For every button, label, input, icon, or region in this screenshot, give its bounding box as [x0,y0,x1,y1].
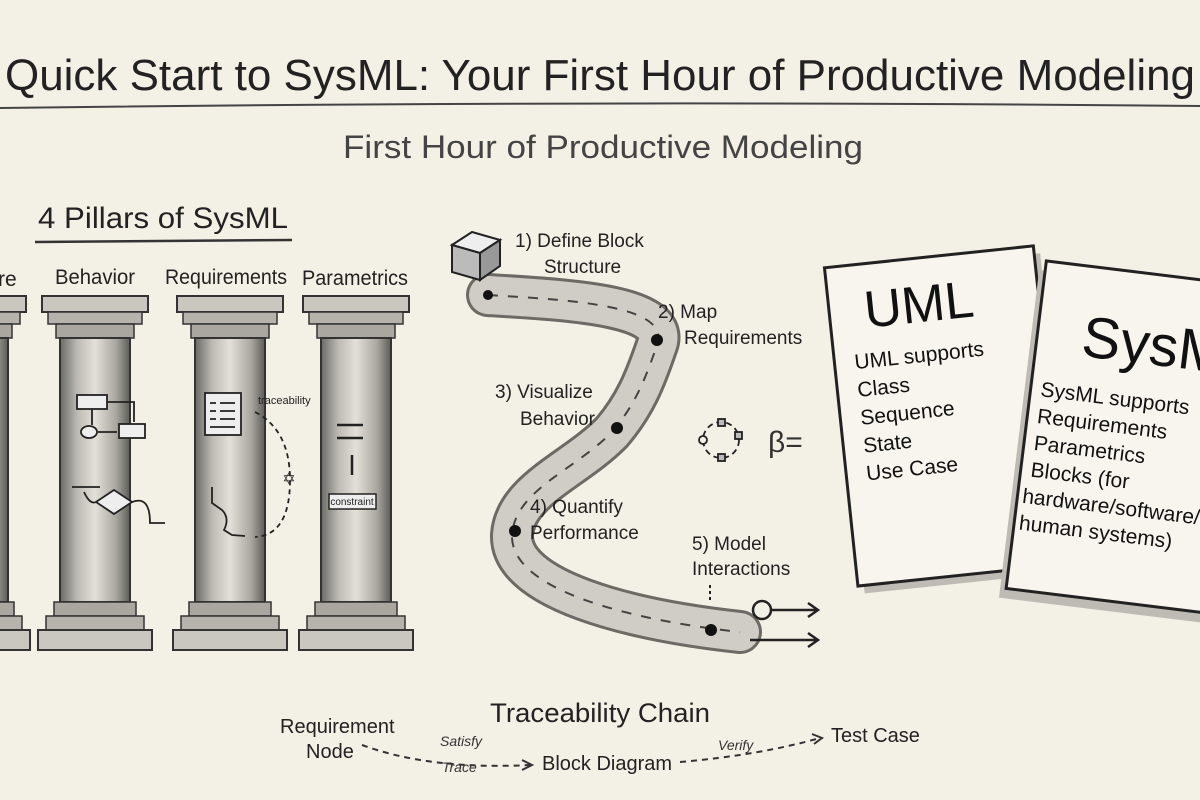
panel: UML doc: UML [861,271,977,340]
panel: SysML doc: hardware/software/ [1021,485,1200,529]
panel: SysML doc: human systems) [1018,512,1174,553]
arrows [750,601,818,647]
panel: traceability chain: Test Case [831,725,920,747]
step 3: 3) Visualize [495,382,593,403]
pillar labels: Behavior [55,266,135,289]
panel: traceability chain: Verify [718,737,754,753]
pillar: structure (partial) [0,296,30,650]
panel: traceability chain [280,698,920,775]
panel: pillars [0,266,413,650]
step 5: 5) Model [692,534,766,555]
panel: SysML doc: Requirements [1036,405,1168,444]
panel: UML doc [824,245,1074,594]
pillar labels [0,266,408,291]
pillar: requirements [173,296,311,650]
panel: UML doc: Use Case [865,453,959,486]
step 4: 4) Quantify [530,497,623,518]
step 3: Behavior [520,409,596,430]
panel: traceability chain: Trace [442,759,477,775]
panel: traceability chain: Requirement [280,716,395,738]
panel: UML doc: Sequence [859,397,956,430]
pillar labels: Requirements [165,266,287,289]
road [488,295,740,632]
panel: UML doc: UML supports [853,338,985,374]
icon: cycle [699,419,742,461]
pillar: behavior [38,296,165,650]
step 2: 2) Map [658,302,717,323]
pillar: requirements: ✡ [282,471,296,488]
icon: cube [452,232,500,280]
panel: SysML doc [999,260,1200,625]
title: Quick Start to SysML: Your First Hour of Productive Modeling [5,51,1195,100]
panel: UML doc: State [862,430,913,458]
panel: UML doc: Class [856,374,911,402]
pillar: parametrics: constraint [330,497,374,508]
panel: traceability chain: Block Diagram [542,753,672,775]
pillar: requirements: traceability [258,395,311,407]
panel: traceability chain: Node [306,741,354,763]
pillar: parametrics [299,296,413,650]
panel: roadmap [452,231,818,647]
panel: traceability chain: Traceability Chain [490,698,710,728]
step 5: Interactions [692,559,790,580]
step markers [483,290,717,636]
step 4: Performance [530,523,639,544]
heading: 4 pillars: 4 Pillars of SysML [38,202,288,235]
panel: SysML doc: SysML supports [1039,378,1191,419]
beta: β= [768,426,803,459]
panel: SysML doc: Blocks (for [1029,459,1131,494]
step 1: Structure [544,257,621,278]
step 2: Requirements [684,328,802,349]
step 1: 1) Define Block [515,231,644,252]
panel: SysML doc: Parametrics [1033,432,1147,468]
subtitle: First Hour of Productive Modeling [343,129,863,165]
pillar labels: Parametrics [302,267,408,290]
panel: traceability chain: Satisfy [440,733,483,749]
